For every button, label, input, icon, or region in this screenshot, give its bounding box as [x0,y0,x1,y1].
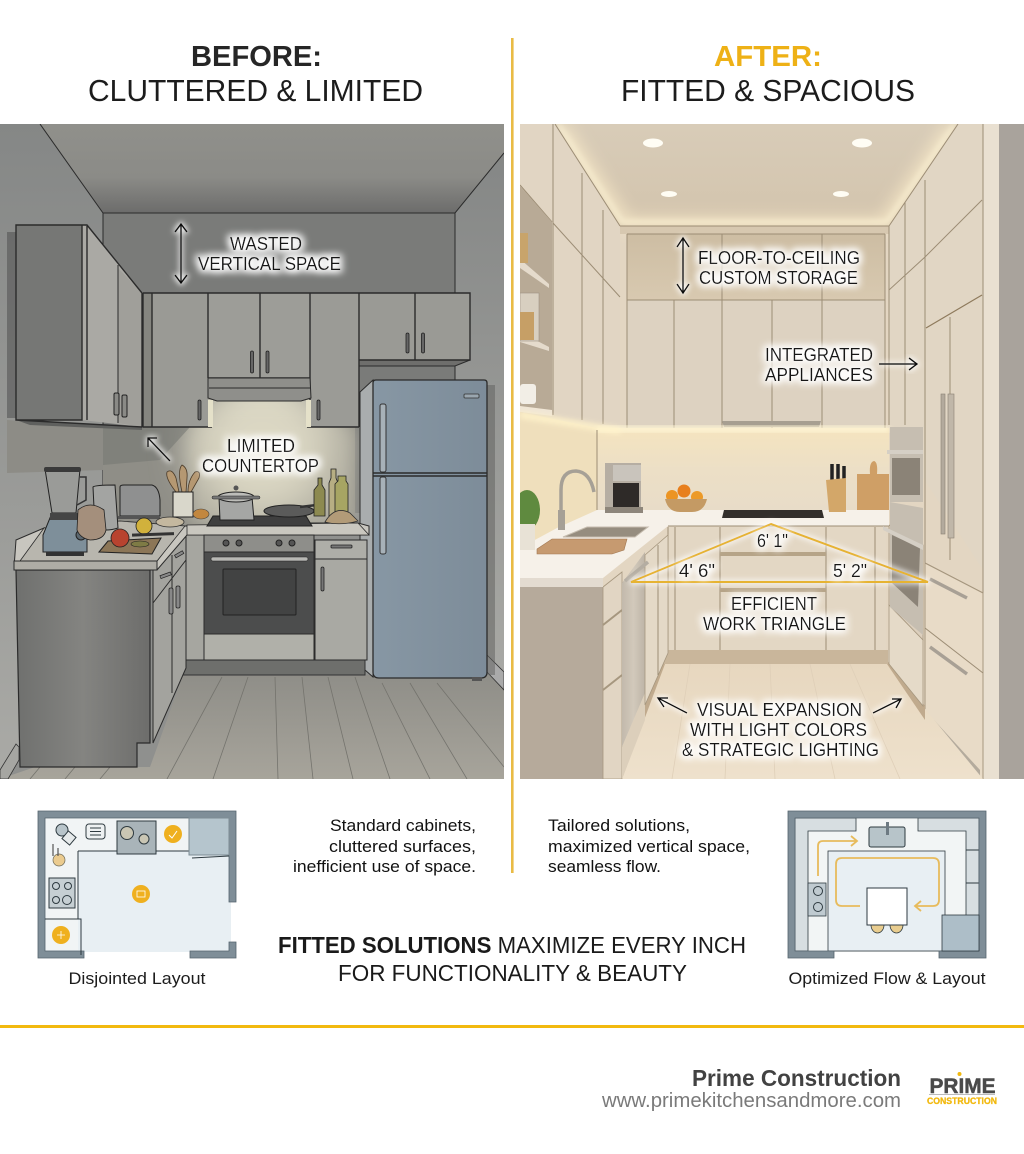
range hood [208,378,311,427]
floor [0,675,504,779]
work triangle: 5' 2" [833,561,867,581]
recessed lights [643,138,872,197]
cooktop, pot and pan [207,486,325,526]
side cabinets and dishwasher [520,535,668,779]
wooden board [537,539,627,554]
arrow: left outward [658,698,687,713]
shadow under tall cabinet [7,420,103,473]
arrow: right [879,358,917,370]
heading: before: BEFORE: [191,41,322,73]
label: wasted vertical space [175,224,341,283]
counter top [14,523,369,570]
yellow markers [164,825,182,843]
counters [795,818,856,951]
label: floor-to-ceiling custom storage: FLOOR-TO-CEILING [698,248,860,268]
text block: after description [548,816,750,876]
work triangle [631,524,928,634]
canister and kettle [77,485,118,540]
logo: prime construction [927,1072,997,1106]
text block: before description: inefficient use of space. [293,857,476,876]
cooktop [49,878,75,908]
base cabinets and counter [14,521,369,767]
heading: after [621,41,915,108]
side doors [153,530,186,743]
back wall [103,213,455,513]
fruit bowl [665,484,707,512]
open shelves [520,186,552,416]
left tall cabinets [520,124,620,428]
label: floor-to-ceiling custom storage: CUSTOM STORAGE [699,268,858,288]
coffee maker [605,463,643,513]
lower right drawers [925,563,983,779]
panel: before kitchen illustration [0,124,504,779]
footer company name and url: www.primekitchensandmore.com [601,1090,901,1112]
right wall [483,154,504,675]
upper back cabinets [620,226,890,428]
caption: disjointed layout: Disjointed Layout [68,969,206,988]
text block: before description: Standard cabinets, [330,816,476,835]
text block: after description: seamless flow. [548,857,661,876]
label: visual expansion: & STRATEGIC LIGHTING [682,740,879,760]
flow arrows [818,836,857,876]
heading: before: CLUTTERED & LIMITED [88,74,423,108]
cove lighting [560,126,952,224]
utensil crock [167,465,200,517]
base cabinets [663,525,923,706]
toaster [118,485,160,519]
text block: after description: Tailored solutions, [548,816,690,835]
blender [43,467,87,556]
ceiling [555,124,958,226]
panel: after kitchen illustration [514,124,1024,779]
arrow: vertical double [175,224,187,283]
text block: before description [293,816,476,876]
sink and faucet [558,471,648,537]
footer company name and url: Prime Construction [692,1065,901,1091]
label: floor-to-ceiling custom storage [677,238,860,293]
knife block and board [826,461,889,512]
floor plan: disjointed layout [38,811,236,958]
logo: prime construction: CONSTRUCTION [927,1096,997,1106]
heading: after: AFTER: [714,41,822,73]
arrow: vertical double [677,238,689,293]
caption: optimized flow: Optimized Flow & Layout [788,969,986,988]
label: wasted vertical space: WASTED [230,234,302,254]
center divider line [511,38,514,873]
cooktop [722,510,824,518]
fridge [942,915,979,951]
heading: after: FITTED & SPACIOUS [621,74,915,108]
work triangle: EFFICIENT [731,594,817,614]
floor plan: optimized flow [788,811,986,958]
tagline: FITTED SOLUTIONS MAXIMIZE EVERY INCH [278,932,746,958]
left wall [0,124,103,779]
sink [869,827,905,847]
label: limited countertop: COUNTERTOP [202,456,319,476]
label: integrated appliances [765,345,917,385]
ceiling [80,179,482,212]
text block: before description: cluttered surfaces, [329,837,476,856]
tagline [278,932,746,986]
logo: prime construction: PRIME [930,1075,996,1098]
fridge handles [941,394,945,534]
small appliances [56,824,68,836]
stove [808,883,826,916]
work triangle: 6' 1" [757,531,788,551]
tall wall cabinet [7,225,142,430]
tagline: FOR FUNCTIONALITY & BEAUTY [338,960,687,986]
arrow: to counter corner [148,438,170,461]
label: visual expansion [658,698,901,760]
island and stools [871,925,903,933]
countertop [520,578,603,587]
walls [38,811,236,958]
heading: before [88,41,423,108]
wall ovens [883,427,923,635]
baseboards [0,744,19,779]
food on counter [99,509,209,554]
label: limited countertop: LIMITED [227,436,295,456]
label: visual expansion: WITH LIGHT COLORS [690,720,867,740]
right tall cabinets [889,124,1024,779]
fridge block [189,818,229,855]
stove [117,821,156,854]
fridge [360,380,495,681]
backsplash light [103,428,355,513]
work triangle: 4' 6" [679,561,715,581]
arrow: right outward [873,699,901,713]
footer rule [0,1025,1024,1028]
label: limited countertop [148,436,319,476]
base front [16,570,150,767]
oven [204,535,314,660]
plant [514,490,540,550]
floor [615,664,983,779]
bottles [314,469,358,524]
label: integrated appliances: INTEGRATED [765,345,873,365]
work triangle: WORK TRIANGLE [703,614,846,634]
label: wasted vertical space: VERTICAL SPACE [198,254,341,274]
backsplash [520,412,889,548]
text block: after description: maximized vertical space, [548,837,750,856]
walls [788,811,986,958]
label: integrated appliances: APPLIANCES [765,365,873,385]
label: visual expansion: VISUAL EXPANSION [697,700,862,720]
footer company name and url [601,1065,901,1112]
upper cabinets [143,293,470,427]
